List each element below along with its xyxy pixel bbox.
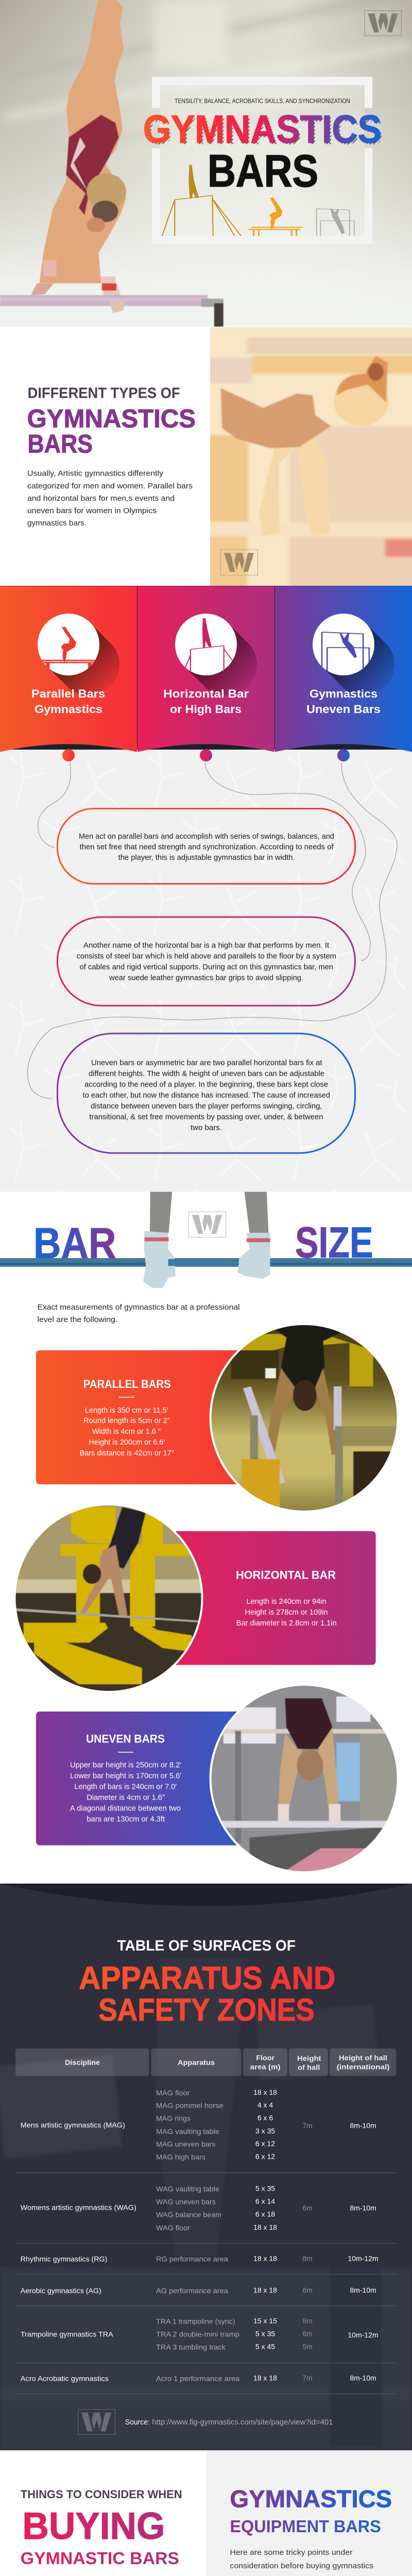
column: height of hall: 8m [302, 2316, 313, 2325]
column: floor area: 6 x 14 [255, 2197, 275, 2206]
column: apparatus: TRA 3 tumbling track [156, 2343, 226, 2351]
description box: uneven: according to the need of a player. In the beginning, these bars kept close [84, 1081, 328, 1089]
card: uneven bars [275, 586, 412, 752]
intro text: Here are some tricky points under [230, 2548, 352, 2557]
column: apparatus [156, 2089, 239, 2383]
table header: Height of hall [339, 2054, 387, 2062]
description box: horizontal [58, 917, 355, 1006]
card: horizontal bar sizes [154, 1531, 376, 1665]
description box: parallel: Men act on parallel bars and accomplish with series of swings, balances, and [79, 833, 334, 841]
panel: hero [0, 0, 412, 327]
table header: Height [297, 2054, 321, 2062]
row dividers [15, 2173, 396, 2394]
column: height of hall: 6m [302, 2330, 313, 2338]
heading: table of surfaces: TABLE OF SURFACES OF [117, 1938, 296, 1954]
subtitle: TENSILITY, BALANCE, ACROBATIC SKILLS, AND SYNCHRONIZATION [175, 97, 350, 105]
card title [163, 687, 249, 716]
source line: http://www.fig-gymnastics.com/site/page/view?id=401 [152, 2418, 333, 2427]
column: apparatus: MAG floor [156, 2089, 190, 2097]
column: apparatus: MAG high bars [156, 2153, 205, 2161]
heading: gymnastics bars: BARS [28, 430, 93, 459]
column: apparatus: WAG vaulitng table [156, 2184, 219, 2193]
card: parallel bars sizes: Width is 4cm or 1.6 ″ [92, 1428, 161, 1436]
description box: uneven: transitional, & set free movements by passing over, under, & between [90, 1113, 323, 1122]
column: height of hall: 6m [302, 2204, 313, 2212]
column: apparatus: WAG balance beam [156, 2210, 221, 2218]
heading: bar: BAR [33, 1219, 116, 1267]
photo background: faded gymnast [0, 2006, 411, 2449]
column: apparatus: MAG pommel horse [156, 2102, 224, 2110]
description box: uneven: to each other, but now the distance has increased. The cause of increased [83, 1091, 330, 1099]
intro paragraph [27, 470, 193, 528]
column: discipline: Acro Acrobatic gymnastics [21, 2375, 109, 2383]
card: uneven bars sizes: Diameter is 4cm or 1.6″ [87, 1794, 165, 1802]
photo: horizontal bar gymnast [13, 1503, 205, 1694]
column: discipline: Trampoline gymnastics TRA [21, 2330, 113, 2338]
card: parallel bars sizes: Round length is 5cm or 2″ [83, 1417, 170, 1425]
heading: gymnastics bars: GYMNASTICS [27, 404, 196, 433]
column: floor area: 6 x 6 [258, 2114, 273, 2122]
card: uneven bars sizes: Lower bar height is 170cm or 5.6′ [70, 1772, 181, 1781]
column: discipline [21, 2121, 136, 2383]
table header: area (m) [250, 2063, 280, 2071]
card title: Horizontal Bar [163, 687, 249, 700]
column: floor area: 4 x 4 [258, 2101, 273, 2109]
photo: gymnast handstand on bar [40, 0, 126, 283]
logo watermark [78, 2409, 115, 2435]
column: floor area: 18 x 18 [253, 2255, 277, 2263]
heading: size: SIZE [295, 1218, 373, 1267]
card: uneven bars sizes: UNEVEN BARS [86, 1732, 165, 1745]
column: height of hall international: 8m-10m [350, 2122, 376, 2130]
heading: equipment bars: EQUIPMENT BARS [230, 2517, 381, 2536]
column: apparatus: MAG rings [156, 2114, 191, 2123]
icon: horizontal bar gymnast [175, 614, 257, 696]
card: parallel bars sizes: PARALLEL BARS [83, 1378, 171, 1391]
card: uneven bars sizes: Length of bars is 240cm or 7.0′ [74, 1783, 177, 1791]
column: floor area: 18 x 18 [253, 2374, 277, 2382]
heading: apparatus and safety zones: SAFETY ZONES [98, 1992, 315, 2027]
description box: uneven: two bars. [191, 1124, 222, 1132]
column: height of hall: 7m [302, 2122, 313, 2130]
logo watermark [188, 1212, 226, 1238]
intro paragraph: categorized for men and women. Parallel bars [27, 482, 193, 490]
column: apparatus: RG performance area [156, 2255, 228, 2263]
description box: uneven: distance between uneven bars the player performs swinging, circling, [91, 1103, 322, 1111]
card: horizontal bar sizes: Height is 278cm or 109in [245, 1608, 328, 1617]
card: horizontal bar sizes: Bar diameter is 2.8cm or 1.1in [236, 1619, 337, 1628]
description box: horizontal: consists of steel bar which is held above and parallels to the floor by a system [76, 952, 336, 960]
column: floor area: 6 x 12 [255, 2153, 275, 2161]
heading: gymnastic bars: GYMNASTIC BARS [21, 2549, 179, 2568]
intro text [230, 2548, 373, 2576]
heading: apparatus and safety zones: APPARATUS AND [79, 1961, 336, 1996]
intro text: Exact measurements of gymnastics bar at a professional [37, 1303, 240, 1312]
column: floor area: 18 x 18 [253, 2088, 277, 2096]
panel: bar type cards background [0, 586, 412, 1192]
card title: Gymnastics [310, 687, 377, 700]
intro text: consideration before buying gymnastics [230, 2562, 373, 2570]
card: horizontal bar [138, 586, 274, 752]
card: horizontal bar sizes: HORIZONTAL BAR [236, 1569, 336, 1582]
table header: of hall [298, 2063, 320, 2072]
source line: Source: [125, 2418, 150, 2427]
column: height of hall international [348, 2122, 379, 2382]
column: height of hall [302, 2122, 313, 2382]
card: parallel bars sizes: Length is 350 cm or 11.5′ [85, 1406, 168, 1415]
photo: uneven bars gymnast [209, 1684, 399, 1874]
icon: parallel bars gymnast [38, 614, 119, 696]
card title: Gymnastics [35, 703, 102, 716]
column: height of hall international: 8m-10m [350, 2204, 376, 2212]
column: floor area: 6 x 12 [255, 2140, 275, 2148]
card: parallel bars sizes [36, 1350, 319, 1484]
heading: gymnastics: GYMNASTICS [230, 2485, 392, 2512]
column: apparatus: MAG vaulting table [156, 2127, 219, 2136]
description box: uneven: different heights. The width & height of uneven bars can be adjustable [89, 1070, 324, 1078]
logo watermark [365, 10, 402, 36]
card: parallel bars sizes: Bars distance is 42cm or 17″ [80, 1449, 174, 1458]
column: floor area: 5 x 35 [255, 2184, 275, 2192]
heading: apparatus and safety zones [79, 1961, 336, 2027]
heading: gymnastics bars [27, 404, 196, 459]
table header: (international) [337, 2063, 390, 2071]
title: gymnastics: GYMNASTICS [145, 109, 383, 153]
photo: hands on bar [0, 1192, 412, 1288]
column: discipline: Mens artistic gymnastics (MAG) [21, 2121, 125, 2129]
panel: bar size [0, 1192, 412, 1884]
card: uneven bars sizes: Upper bar height is 250cm or 8.2′ [70, 1761, 181, 1769]
card title [31, 687, 105, 716]
panel: gymnastics equipment bars [206, 2450, 412, 2576]
card: parallel bars sizes: Height is 200cm or 6.6′ [89, 1438, 165, 1447]
table header [15, 2048, 396, 2076]
logo watermark [220, 550, 258, 575]
column: floor area: 6 x 18 [255, 2210, 275, 2218]
title: gymnastics: GYMNASTICS [143, 108, 382, 151]
column: floor area [253, 2088, 277, 2382]
column: height of hall: 6m [302, 2286, 313, 2294]
intro text: level are the following. [37, 1315, 117, 1324]
card title [306, 687, 381, 716]
column: height of hall international: 8m-10m [350, 2374, 376, 2382]
column: height of hall: 5m [302, 2343, 313, 2351]
description box: horizontal: wear suede leather gymnastics bar grips to avoid slipping. [109, 974, 303, 982]
column: floor area: 18 x 18 [253, 2286, 277, 2294]
panel: different types intro [0, 319, 412, 594]
table header: Discipline [65, 2058, 100, 2066]
card: uneven bars sizes [36, 1711, 319, 1845]
column: height of hall international: 8m-10m [350, 2286, 376, 2294]
column: height of hall international: 10m-12m [348, 2255, 379, 2263]
description box: parallel [58, 809, 355, 884]
intro paragraph: uneven bars for women in Olympics [27, 507, 157, 515]
column: floor area: 3 x 35 [255, 2127, 275, 2135]
card title: or High Bars [170, 703, 242, 716]
column: floor area: 5 x 35 [255, 2330, 275, 2338]
column: apparatus: AG performance area [156, 2286, 228, 2295]
connector dots [62, 749, 350, 761]
description box: uneven [58, 1033, 355, 1153]
heading: things to consider: THINGS TO CONSIDER WHEN [21, 2488, 182, 2501]
column: apparatus: Acro 1 performance area [156, 2375, 239, 2383]
card: uneven bars sizes: A diagonal distance between two [70, 1805, 181, 1813]
column: height of hall international: 10m-12m [348, 2331, 379, 2339]
card title: Parallel Bars [31, 687, 105, 700]
card: parallel bars [0, 586, 137, 752]
heading: buying: BUYING [22, 2505, 165, 2547]
column: floor area: 5 x 45 [255, 2343, 275, 2351]
column: apparatus: TRA 2 double-mini tramp [156, 2330, 239, 2338]
column: height of hall: 8m [302, 2255, 313, 2263]
description box: horizontal: Another name of the horizontal bar is a high bar that performs by men. It [83, 941, 329, 950]
photo: parallel bars gymnast [206, 1323, 402, 1513]
table header: Floor [256, 2054, 275, 2062]
table header: Apparatus [178, 2058, 215, 2066]
card title: Uneven Bars [306, 703, 381, 716]
column: height of hall: 7m [302, 2374, 313, 2382]
intro paragraph: gymnastics bars. [27, 519, 87, 528]
card: horizontal bar sizes: Length is 240cm or 94in [247, 1598, 327, 1606]
title frame [152, 77, 372, 244]
column: apparatus: WAG floor [156, 2224, 190, 2232]
column: discipline: Aerobic gymnastics (AG) [21, 2286, 101, 2295]
panel: table of surfaces [0, 1884, 412, 2450]
column: apparatus: WAG uneven bars [156, 2198, 216, 2206]
description box: parallel: the player, this is adjustable gymnastics bar in width. [118, 854, 295, 862]
column: floor area: 15 x 15 [253, 2316, 277, 2325]
card: uneven bars sizes: bars are 130cm or 4.3ft [87, 1816, 165, 1824]
column: apparatus: TRA 1 trampoline (sync) [156, 2317, 235, 2326]
icon: uneven bars gymnast [313, 614, 394, 696]
dotted connectors [28, 764, 397, 1098]
column: discipline: Rhythmic gymnastics (RG) [21, 2255, 107, 2263]
intro paragraph: Usually, Artistic gymnastics differently [27, 470, 164, 478]
panel: things to consider when buying [0, 2450, 206, 2576]
column: apparatus: MAG uneven bars [156, 2140, 216, 2148]
description box: uneven: Uneven bars or asymmetric bar are two parallel horizontal bars fix at [91, 1059, 322, 1067]
heading: different types: DIFFERENT TYPES OF [28, 385, 180, 402]
column: discipline: Womens artistic gymnastics (WAG) [21, 2203, 136, 2211]
intro paragraph: and horizontal bars for men,s events and [27, 495, 175, 503]
photo: gymnast in warm tint [210, 327, 412, 586]
intro text [37, 1303, 240, 1324]
column: floor area: 18 x 18 [253, 2223, 277, 2231]
title: bars: BARS [208, 145, 318, 196]
table [15, 2048, 396, 2394]
icons: bar silhouettes [162, 165, 354, 236]
description box: horizontal: of cables and rigid vertical supports. During act on this gymnastics bar, men [80, 963, 333, 972]
description box: parallel: then set free that need strength and synchronization. According to needs of [80, 843, 334, 851]
